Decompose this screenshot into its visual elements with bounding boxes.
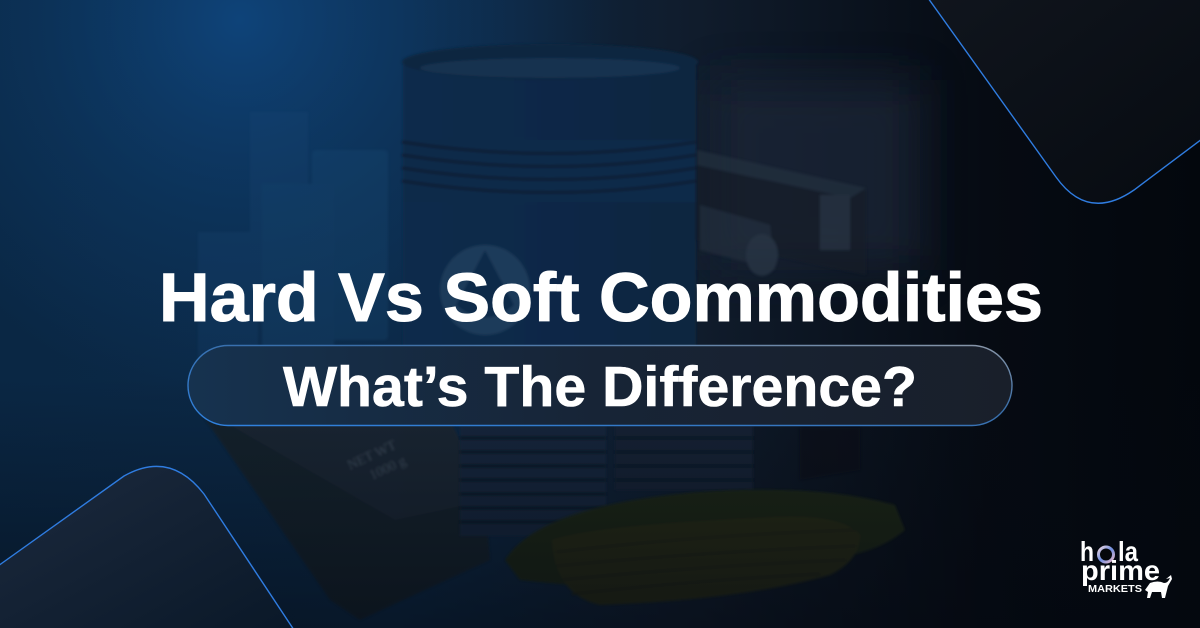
corn — [505, 490, 905, 605]
gold bar: 1000 g — [367, 454, 409, 484]
logo: MARKETS — [1088, 583, 1142, 595]
logo: prime — [1081, 555, 1160, 586]
small drums — [460, 426, 753, 536]
bottom left corner panel — [0, 466, 294, 628]
metal rods — [198, 112, 388, 412]
oil barrel — [402, 44, 698, 372]
gold bar: NET WT — [345, 438, 399, 474]
subtitle: What’s The Difference? — [283, 355, 917, 419]
logo: h — [1080, 536, 1094, 567]
logo — [1080, 536, 1172, 598]
title: Hard Vs Soft Commodities — [159, 259, 1043, 336]
gold bar — [192, 400, 490, 620]
subtitle pill — [188, 346, 1012, 426]
steel beams — [697, 150, 900, 480]
logo: la — [1118, 536, 1138, 567]
top right corner panel — [928, 0, 1200, 203]
